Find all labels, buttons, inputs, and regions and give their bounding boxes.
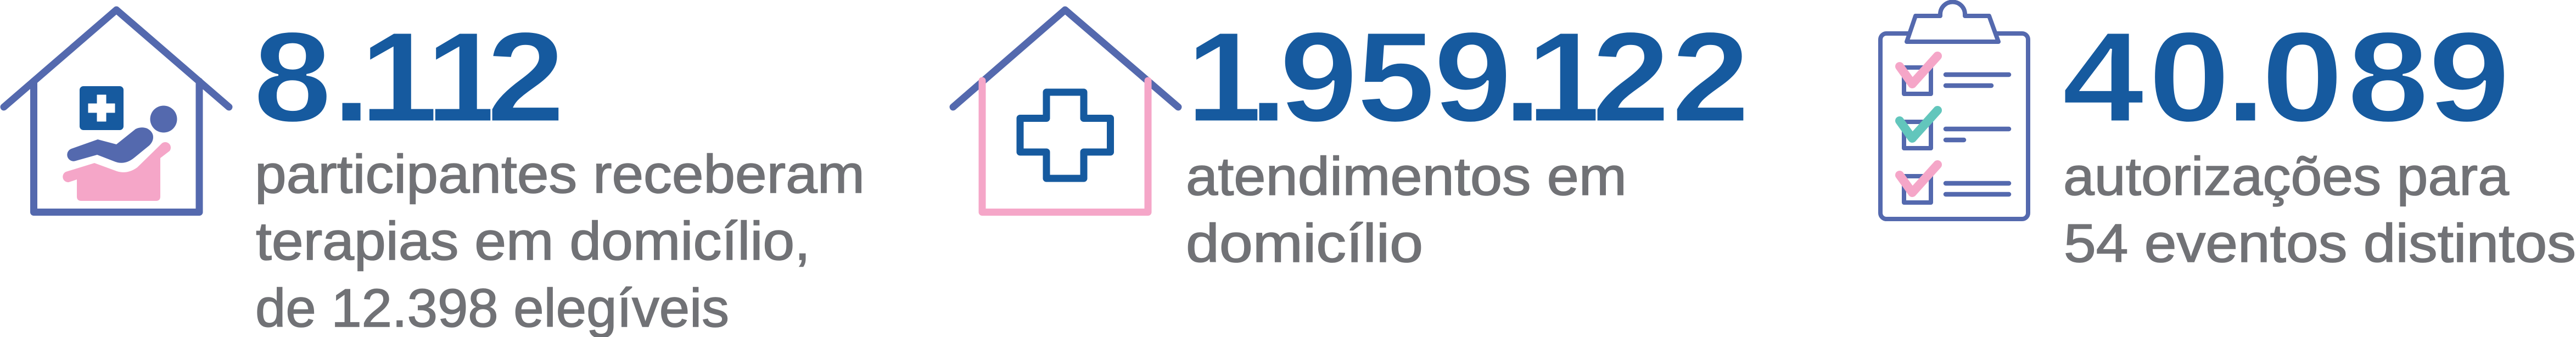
description: autorizações: autorizações para (2063, 146, 2510, 206)
checkbox row 3 (1900, 165, 2009, 203)
cross outline (1020, 92, 1110, 178)
description: atendimentos: domicílio (1186, 213, 1423, 273)
patient head (150, 105, 177, 133)
checkbox row 1 (1900, 56, 2009, 94)
description: participantes: de 12.398 elegíveis (255, 278, 729, 337)
description: participantes: participantes receberam (255, 144, 865, 204)
stat number: 40.089: 40.089 (2062, 5, 2510, 149)
patient body (67, 127, 153, 163)
description: participantes (255, 144, 865, 337)
medical cross sign (80, 86, 124, 130)
walls (982, 81, 1148, 212)
roof (953, 10, 1178, 107)
icon: house with cross (953, 10, 1178, 212)
icon: house with patient on recliner (4, 10, 229, 212)
description: autorizações: 54 eventos distintos (2064, 213, 2576, 273)
clipboard board (1880, 33, 2028, 219)
description: participantes: terapias em domicílio, (256, 211, 810, 271)
icon: clipboard checklist (1880, 2, 2028, 219)
house outline (4, 10, 229, 212)
clipboard clip (1907, 2, 1998, 42)
description: atendimentos: atendimentos em (1186, 146, 1627, 206)
description: atendimentos (1186, 146, 1627, 273)
stat number: 8.112: 8.112 (253, 5, 565, 149)
description: autorizações (2063, 146, 2576, 273)
recliner chair (63, 142, 171, 201)
stat number: 1.959.122: 1.959.122 (1186, 5, 1750, 149)
checkbox row 2 (1900, 110, 2009, 148)
